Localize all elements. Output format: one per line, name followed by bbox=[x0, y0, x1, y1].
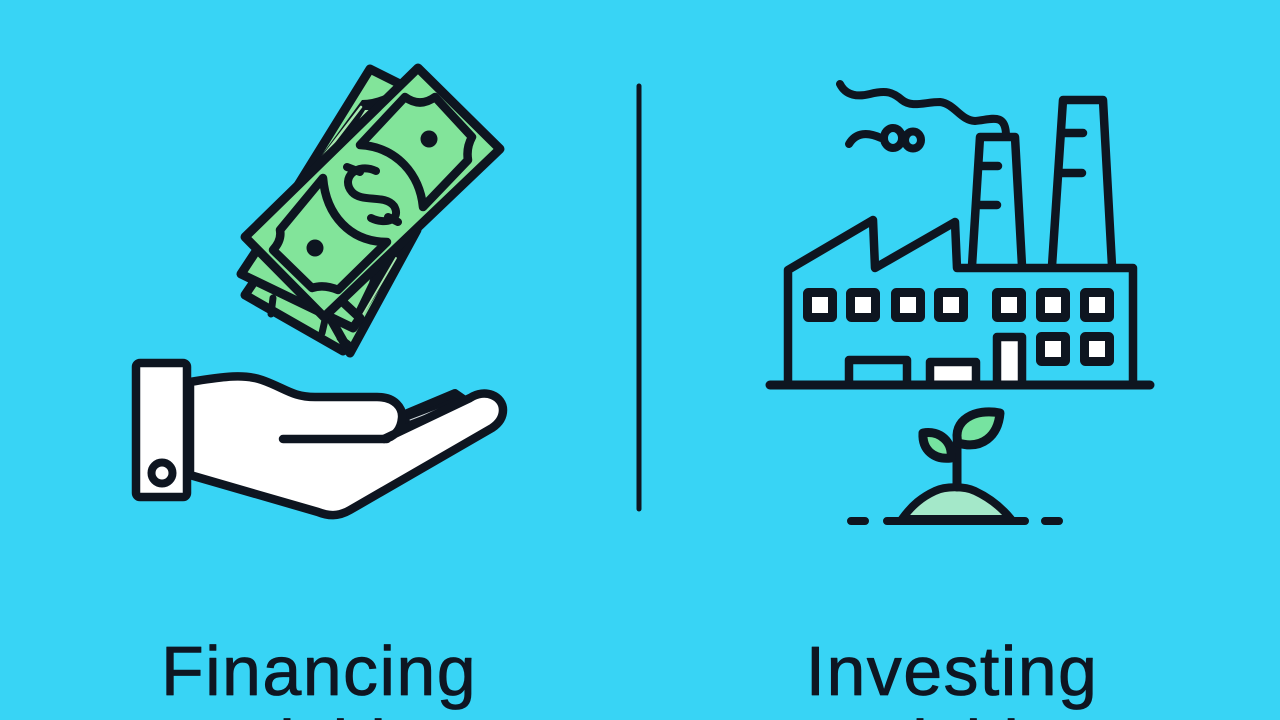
icon: stack of money bbox=[241, 68, 500, 353]
stem bbox=[957, 438, 958, 487]
ground line bbox=[770, 380, 1150, 390]
back bill pale strip bbox=[318, 107, 361, 163]
left leaf bbox=[923, 433, 951, 458]
finger crease bbox=[283, 435, 387, 443]
building outline bbox=[788, 220, 1133, 385]
palm bbox=[190, 376, 503, 515]
tall chimney bbox=[1052, 100, 1112, 266]
soil mound bbox=[902, 487, 1011, 519]
bottom bill bbox=[245, 270, 362, 351]
finger highlight bbox=[410, 404, 452, 420]
right leaf bbox=[957, 412, 1000, 445]
front bill upper panel bbox=[360, 97, 472, 207]
icon: sprout bbox=[851, 412, 1059, 521]
dollar sign bbox=[347, 167, 398, 222]
back bill pale notch bbox=[357, 110, 370, 123]
ground dashes bbox=[851, 517, 1059, 525]
loading door bbox=[849, 360, 907, 385]
divider line bbox=[636, 86, 642, 509]
short chimney bbox=[972, 137, 1022, 266]
front bill bbox=[245, 68, 500, 317]
smoke puff bbox=[849, 134, 881, 144]
icon: open hand bbox=[136, 363, 503, 515]
shirt cuff bbox=[136, 363, 187, 497]
lower right dark wedge bbox=[353, 240, 405, 322]
lower right pale line bbox=[358, 258, 396, 323]
entrance door bbox=[997, 337, 1022, 385]
upper windows bbox=[808, 292, 1110, 362]
middle bill bbox=[241, 230, 360, 328]
garage door bbox=[930, 362, 976, 385]
smoke trail bbox=[840, 84, 1006, 134]
back bill bbox=[295, 69, 417, 353]
cuff button bbox=[152, 462, 172, 484]
back bill dark band bbox=[300, 88, 402, 205]
bill band bbox=[271, 298, 273, 314]
icon: factory bbox=[770, 84, 1150, 385]
bill dots bbox=[420, 130, 438, 148]
heading: investing activities: Investing bbox=[806, 632, 1098, 710]
far finger bbox=[400, 393, 468, 436]
heading: financing activities: Financing bbox=[161, 632, 477, 710]
front bill lower panel bbox=[273, 178, 387, 290]
stack corner detail bbox=[322, 320, 348, 344]
